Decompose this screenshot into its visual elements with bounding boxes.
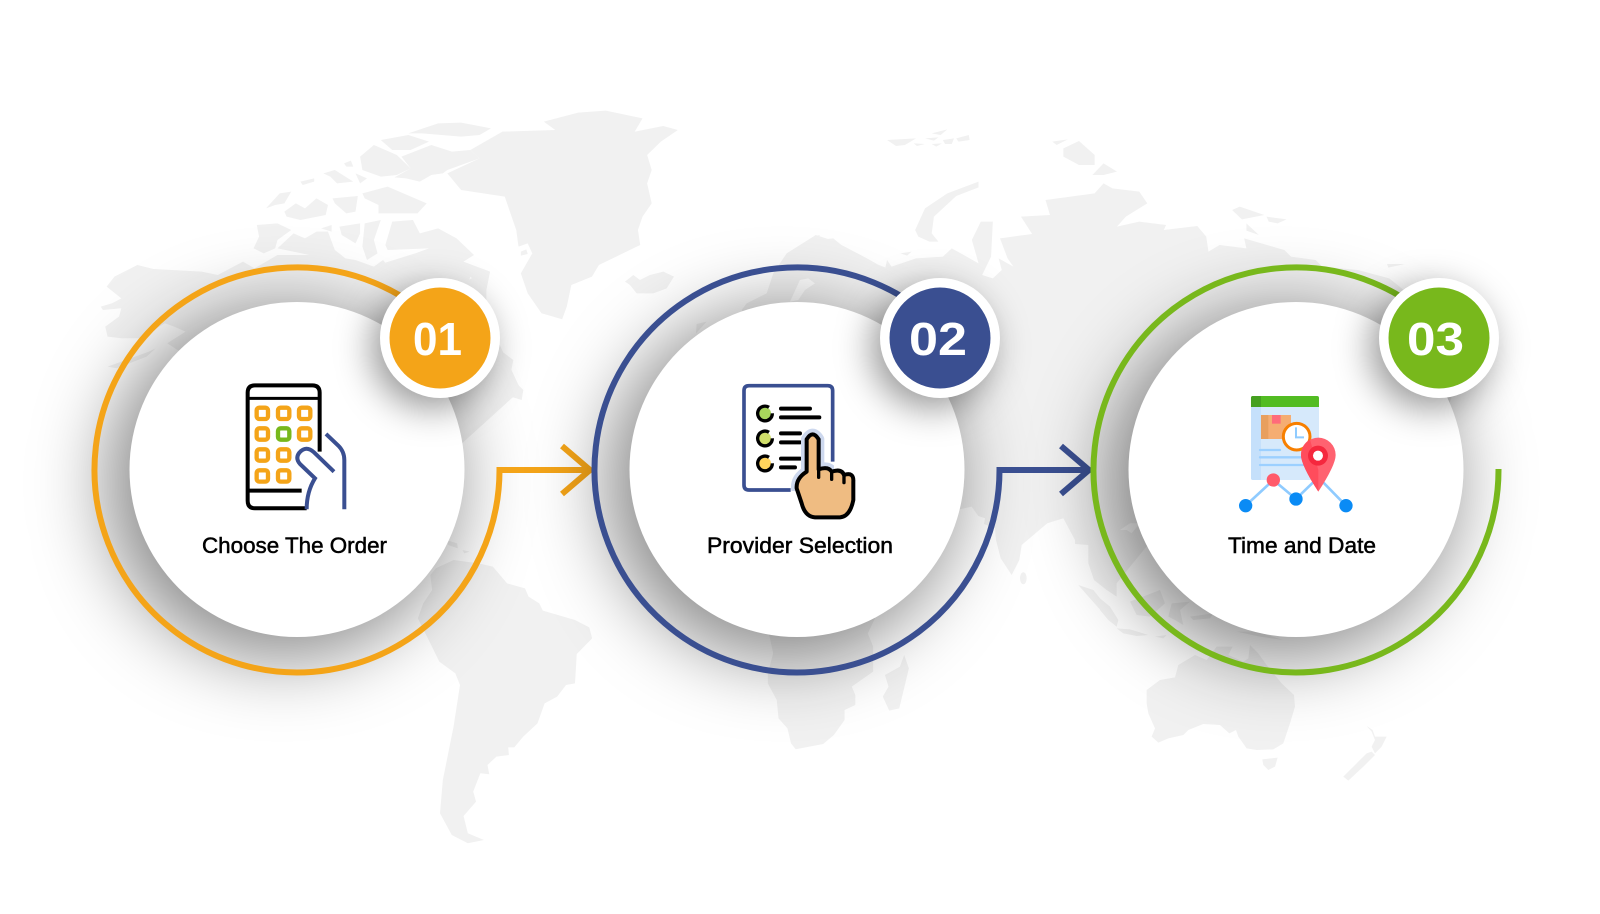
badge 02: 02: [909, 313, 967, 365]
step 2: [594, 267, 1089, 672]
step 3: [1094, 267, 1499, 672]
icon: document, clock and location pin: [1239, 396, 1353, 512]
map: iceland, newfoundland and europe: [480, 235, 900, 413]
step 1 ring and arrow line: [94, 267, 590, 672]
world map background: [101, 111, 1470, 843]
badge 03: 03: [1407, 313, 1464, 365]
badge 01: 01: [413, 313, 462, 365]
icon: checklist with pointing hand: [744, 386, 853, 517]
map: madagascar: [883, 655, 909, 711]
badge 01: [380, 278, 500, 398]
badge 03: [1379, 278, 1499, 398]
map: indonesia, australia, new zealand: [1100, 590, 1387, 781]
step 2 white disc: [630, 302, 964, 637]
step 3 drop shadow: [1107, 310, 1455, 658]
icon: phone with hand: [248, 385, 344, 509]
step 1 arrow head: [562, 446, 590, 494]
map: russia and arctic islands: [800, 129, 1470, 477]
step 2 arrow head: [1061, 446, 1089, 494]
step 1: [94, 267, 590, 672]
badge 03 shadow: [1371, 288, 1491, 408]
infographic canvas: [58, 110, 1514, 843]
step 2 drop shadow: [608, 310, 956, 658]
step 3 white disc: [1128, 302, 1464, 637]
map: greenland and arctic canada: [101, 111, 678, 457]
label: Provider Selection: Provider Selection: [707, 533, 893, 558]
badge 02: [880, 278, 1000, 398]
badge 02 shadow: [872, 288, 992, 408]
label: Choose The Order: Choose The Order: [202, 533, 387, 558]
map: south america: [418, 507, 909, 843]
step 1 white disc: [130, 302, 464, 637]
step 1 drop shadow: [108, 310, 456, 658]
step 2 ring and arrow line: [594, 267, 1089, 672]
map: south asia: [860, 330, 1193, 627]
label: Time and Date: Time and Date: [1228, 533, 1376, 558]
badge 01 shadow: [372, 288, 492, 408]
step 3 ring: [1094, 267, 1499, 672]
map: africa: [721, 507, 900, 749]
